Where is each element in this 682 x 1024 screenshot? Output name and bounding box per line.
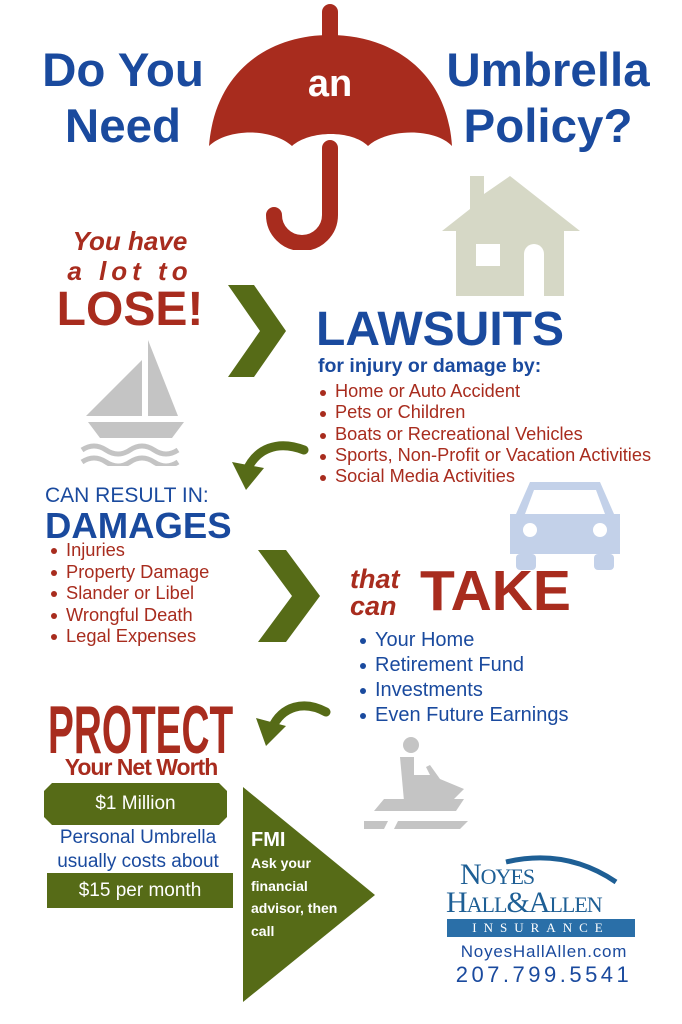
icon: house: [442, 176, 580, 296]
heading: protect: Your Net Worth: [65, 754, 217, 780]
title left: Do You: [42, 44, 204, 97]
icon: umbrella: an: [308, 63, 352, 105]
text: personal umbrella: [57, 827, 219, 872]
logo: Noyes Hall & Allen: NOYES: [460, 858, 534, 891]
text: damages list: Injuries: [66, 539, 125, 560]
arrow: chevron 1: [228, 285, 286, 377]
text: injury list: Boats or Recreational Vehicles: [335, 424, 583, 444]
callout: FMI triangle: [243, 787, 375, 1002]
logo: Noyes Hall & Allen: HALL&ALLEN: [446, 886, 602, 919]
text: contact: 207.799.5541: [456, 962, 632, 987]
box: $1 million: $1 Million: [95, 793, 176, 814]
title right: Policy?: [464, 100, 632, 153]
icon: umbrella: [209, 4, 452, 250]
callout: FMI triangle: FMI: [251, 829, 285, 851]
text: contact: [456, 942, 632, 987]
box: $15 per month: $15 per month: [79, 880, 201, 901]
heading: lawsuits: LAWSUITS: [316, 303, 564, 356]
logo: Noyes Hall & Allen: INSURANCE: [472, 920, 610, 935]
text: personal umbrella: usually costs about: [57, 851, 219, 872]
title right: [446, 44, 650, 153]
callout: FMI triangle: advisor, then: [251, 900, 337, 916]
heading: that can take: can: [350, 591, 397, 621]
heading: protect: PROTECT: [48, 692, 233, 768]
text: you have a lot to lose: a lot to: [67, 256, 193, 286]
text: damages list: Slander or Libel: [66, 582, 194, 603]
logo: Noyes Hall & Allen: [446, 855, 635, 937]
box: $15 per month: [47, 873, 233, 908]
text: take list: Retirement Fund: [375, 654, 524, 676]
arrow: chevron 2: [258, 550, 320, 642]
text: you have a lot to lose: [57, 226, 203, 336]
text: TAKE: [420, 559, 571, 623]
callout: FMI triangle: financial: [251, 878, 308, 894]
text: you have a lot to lose: LOSE!: [57, 283, 203, 336]
title left: Need: [65, 100, 181, 153]
text: take list: Investments: [375, 679, 483, 701]
heading: damages: DAMAGES: [45, 505, 232, 546]
heading: that can take: [350, 559, 571, 623]
text: take list: [360, 629, 568, 726]
text: injury list: [318, 355, 651, 486]
box: $1 million: [44, 783, 227, 825]
text: damages list: [51, 539, 209, 646]
title left: [42, 44, 204, 153]
text: damages list: Property Damage: [66, 560, 209, 582]
text: injury list: Home or Auto Accident: [335, 381, 520, 401]
text: personal umbrella: Personal Umbrella: [60, 827, 216, 848]
icon: snowmobile: [364, 737, 468, 829]
text: injury list: Pets or Children: [335, 402, 465, 422]
text: take list: Even Future Earnings: [375, 704, 568, 726]
heading: that can take: that: [350, 564, 400, 594]
text: damages list: Wrongful Death: [66, 604, 193, 624]
heading: damages: CAN RESULT IN:: [45, 484, 209, 507]
arrow: curved 1: [232, 441, 308, 490]
callout: FMI triangle: call: [251, 922, 274, 938]
text: injury list: Social Media Activities: [335, 466, 515, 486]
callout: FMI triangle: Ask your: [251, 855, 311, 871]
title right: Umbrella: [446, 44, 650, 97]
text: injury list: for injury or damage by:: [318, 355, 541, 377]
text: damages list: Legal Expenses: [66, 625, 196, 646]
icon: sailboat: [80, 340, 184, 466]
text: take list: Your Home: [375, 629, 474, 651]
icon: car: [510, 482, 620, 570]
text: you have a lot to lose: You have: [73, 226, 187, 256]
arrow: curved 2: [256, 701, 330, 746]
text: contact: NoyesHallAllen.com: [461, 942, 627, 961]
heading: damages: [45, 484, 232, 546]
text: injury list: Sports, Non-Profit or Vacation Activities: [335, 445, 651, 465]
